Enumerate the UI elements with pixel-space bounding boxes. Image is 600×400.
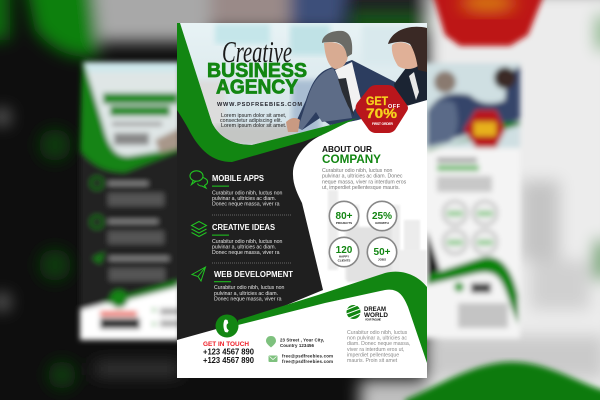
flyer	[177, 23, 427, 378]
about body text: Curabitur odio nibh, luctus non	[322, 168, 392, 174]
green top swoosh	[177, 23, 358, 162]
service: web development	[192, 267, 293, 302]
discount badge: FIRST ORDER	[372, 122, 394, 126]
emails: free@psdfreebies.com	[282, 359, 333, 364]
service: creative ideas: CREATIVE IDEAS	[212, 223, 275, 232]
blurred right flyer	[420, 63, 520, 338]
icon: envelope	[268, 356, 278, 362]
icon: location pin	[266, 336, 276, 348]
icon: phone badge	[216, 314, 238, 338]
blurred left flyer	[80, 62, 180, 340]
about heading	[322, 146, 381, 163]
service: creative ideas: Curabitur odio nibh, luctus non	[212, 239, 282, 245]
stat: 120 happy clients	[329, 237, 359, 267]
service: web development: Curabitur odio nibh, luctus non	[214, 285, 284, 291]
contact: phones: +123 4567 890	[203, 355, 254, 365]
stat: 80+ projects: PROJECTS	[336, 221, 352, 225]
logo: Dream World	[346, 305, 388, 322]
service: creative ideas: Donec neque massa, viver ra	[212, 250, 280, 256]
address	[280, 338, 324, 348]
service: creative ideas	[192, 222, 282, 256]
about body text: pulvinar a, ultricies ac diam. Donec	[322, 174, 403, 180]
about body text: neque massa, viver ra interdum eros	[322, 180, 407, 186]
discount badge: GET	[366, 96, 388, 108]
footer body text: Curabitur odio nibh, luctus	[347, 330, 408, 336]
service: mobile apps: MOBILE APPS	[212, 174, 264, 183]
discount badge	[356, 85, 408, 133]
stat: 120 happy clients: CLIENTS	[338, 258, 350, 262]
contact: phones: +123 4567 890	[203, 346, 254, 356]
title: Business Agency: AGENCY	[216, 76, 298, 98]
about heading: COMPANY	[322, 154, 381, 166]
city skyline background	[328, 190, 427, 285]
service: web development: Donec neque massa, viver ra	[214, 296, 282, 302]
service: mobile apps: Curabitur odio nibh, luctus non	[212, 190, 282, 196]
title: Business Agency: BUSINESS	[207, 59, 307, 82]
contact: phones	[203, 342, 254, 363]
hero body text: Lorem ipsum dolor sit amet.	[221, 123, 286, 129]
footer body text: diam. Donec neque massa,	[347, 341, 410, 347]
about heading: ABOUT OUR	[322, 144, 372, 154]
stat: 80+ projects	[329, 201, 359, 231]
service: creative ideas: pulvinar a, ultricies ac diam.	[212, 244, 276, 250]
about body text: ut, imperdiet pellentesque mauris.	[322, 185, 400, 191]
service: mobile apps: pulvinar a, ultricies ac diam.	[212, 196, 276, 202]
stat: 50+ jobs: JOBS	[378, 258, 386, 262]
hero body text	[220, 113, 286, 129]
title: Business Agency	[208, 62, 307, 94]
logo: Dream World: YOUR TAGLINE	[365, 318, 381, 322]
service: mobile apps: Donec neque massa, viver ra	[212, 202, 280, 208]
stat: 120 happy clients: HAPPY	[339, 254, 349, 258]
contact: phones: GET IN TOUCH	[203, 341, 249, 348]
service: web development: WEB DEVELOPMENT	[214, 270, 293, 279]
icon: paper plane	[192, 267, 206, 281]
flyer sheet	[284, 100, 427, 314]
stat: 50+ jobs	[367, 237, 397, 267]
dark panel	[177, 100, 323, 342]
logo: Dream World: WORLD	[364, 312, 388, 319]
discount badge: 70%	[366, 105, 398, 121]
footer body text: mauris. Proin sit amet	[347, 358, 398, 364]
stat: 25% growth: GROWTH	[375, 221, 389, 225]
icon: layers	[192, 222, 206, 236]
icon: chat bubbles	[190, 171, 208, 188]
service: web development: pulvinar a, ultricies ac diam.	[214, 291, 278, 297]
stat: 50+ jobs: 50+	[374, 247, 391, 258]
address: Country 123456	[280, 343, 315, 348]
footer body text: non pulvinar a, ultricies ac	[347, 336, 407, 342]
stat: 120 happy clients: 120	[336, 245, 353, 256]
man	[286, 31, 398, 132]
bottom white panel	[177, 324, 239, 342]
stat: 25% growth	[367, 201, 397, 231]
emails	[282, 354, 333, 364]
stat: 25% growth: 25%	[372, 211, 392, 222]
woman	[388, 27, 427, 110]
discount badge: OFF	[388, 104, 401, 110]
stat: 80+ projects: 80+	[336, 211, 353, 222]
footer body text	[347, 330, 410, 364]
address: 23 Street , Your City,	[280, 338, 324, 342]
hero body text: Lorem ipsum dolor sit amet,	[221, 113, 286, 119]
website: WWW.PSDFREEBIES.COM	[217, 102, 302, 108]
footer body text: imperdiet pellentesque	[347, 352, 399, 358]
logo: Dream World: DREAM	[364, 306, 386, 313]
divider	[212, 215, 292, 263]
about body text	[322, 168, 407, 191]
hero body text: consectetur adipiscing elit.	[220, 118, 282, 124]
footer body text: viver ra interdum eros ut,	[347, 347, 404, 353]
title: Creative script: Creative	[222, 34, 292, 69]
emails: free@psdfreebies.com	[282, 354, 333, 358]
green bottom swoosh	[238, 272, 427, 363]
service: mobile apps	[190, 171, 282, 208]
photo: business people	[177, 23, 427, 148]
